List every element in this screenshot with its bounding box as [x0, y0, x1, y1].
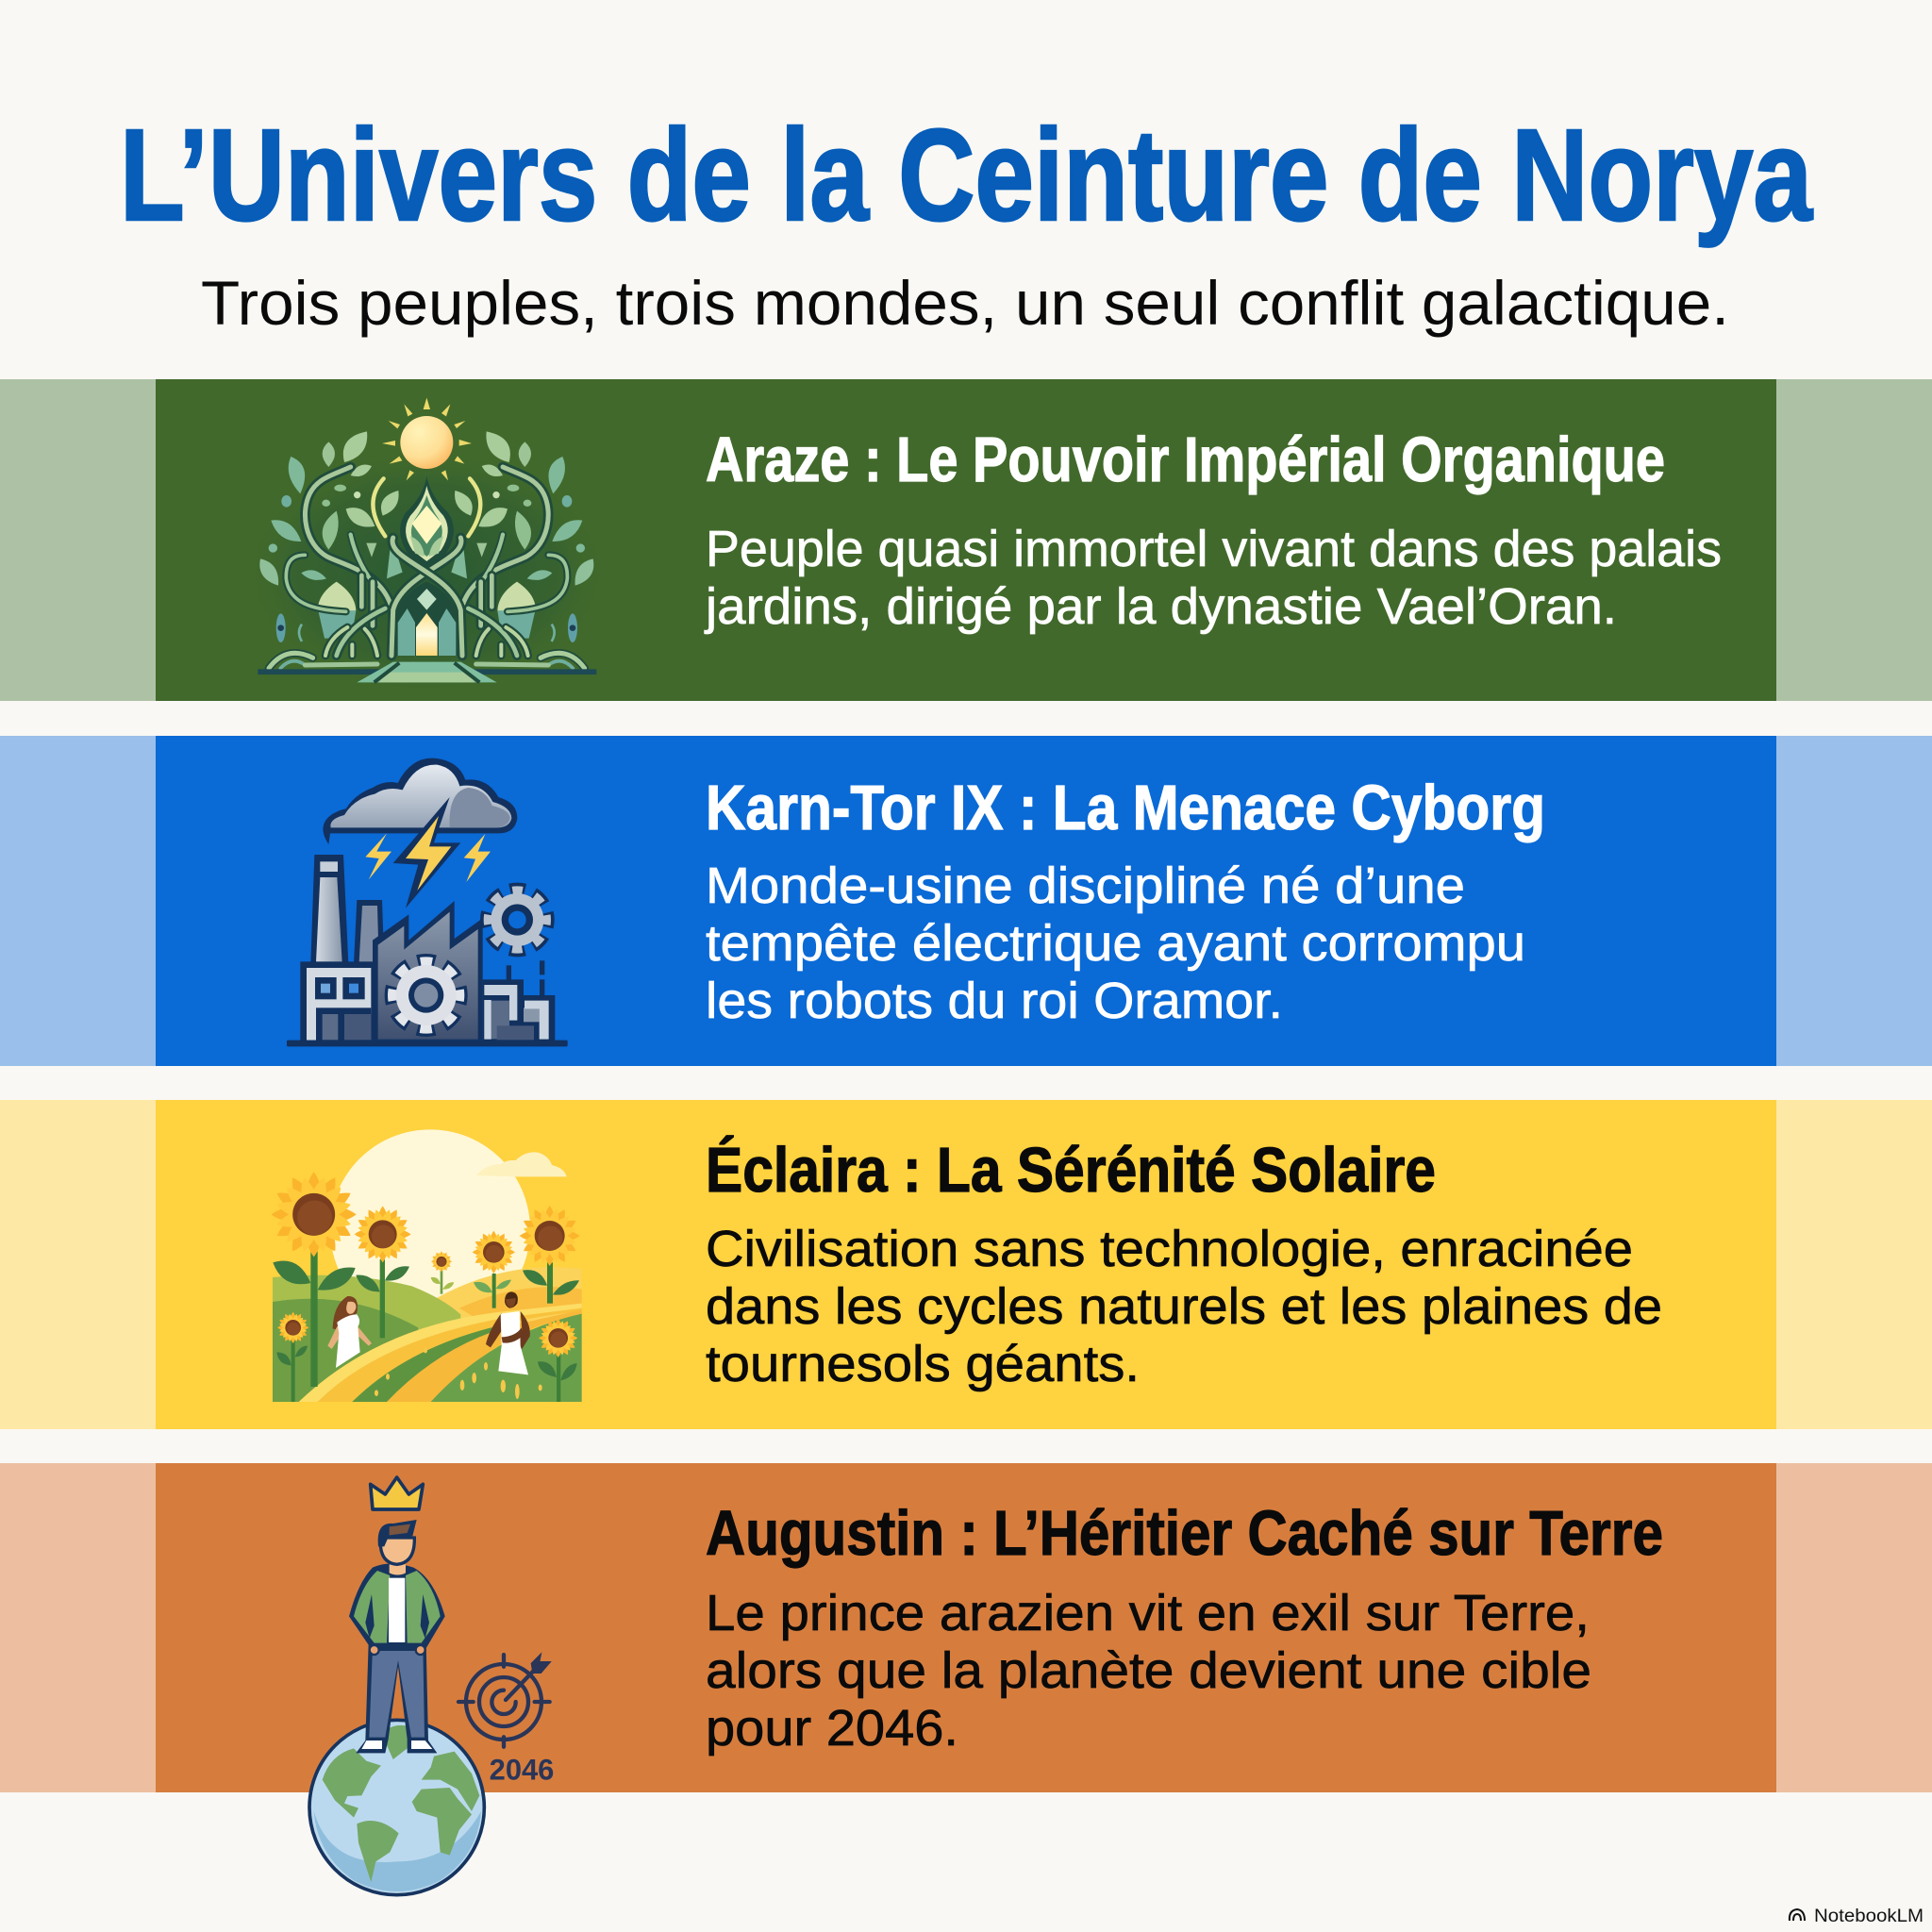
- globe: [309, 1720, 484, 1895]
- description: pour 2046.: [706, 1700, 958, 1757]
- target: [458, 1654, 550, 1747]
- description: [706, 858, 1525, 1029]
- year label: 2046: [490, 1754, 554, 1787]
- watermark: NotebookLM: NotebookLM: [1814, 1907, 1924, 1926]
- icon: crowned heir on Earth with target: [309, 1477, 554, 1895]
- description: alors que la planète devient une cible: [706, 1642, 1591, 1699]
- description: [704, 521, 1722, 635]
- panel: Éclaira: [0, 1100, 1932, 1429]
- description: Le prince arazien vit en exil sur Terre,: [706, 1585, 1590, 1641]
- panel: Augustin: [0, 1463, 1932, 1792]
- figure: woman: [327, 1296, 372, 1368]
- panel: Araze: [0, 379, 1932, 701]
- heading: Augustin : L’Héritier Caché sur Terre: [706, 1498, 1663, 1569]
- description: [706, 1221, 1662, 1392]
- description: les robots du roi Oramor.: [706, 973, 1283, 1029]
- description: dans les cycles naturels et les plaines de: [706, 1278, 1662, 1335]
- description: Civilisation sans technologie, enracinée: [706, 1221, 1633, 1277]
- description: tournesols géants.: [706, 1336, 1140, 1392]
- crown: [371, 1477, 423, 1509]
- heading: Éclaira : La Sérénité Solaire: [706, 1135, 1436, 1206]
- heading: Araze : Le Pouvoir Impérial Organique: [706, 425, 1665, 495]
- heading: Karn-Tor IX : La Menace Cyborg: [706, 773, 1545, 843]
- description: tempête électrique ayant corrompu: [706, 915, 1525, 972]
- description: Monde-usine discipliné né d’une: [706, 858, 1465, 914]
- figure: man: [486, 1291, 530, 1374]
- panel: Karn-Tor IX: [0, 736, 1932, 1066]
- description: Peuple quasi immortel vivant dans des palais: [706, 521, 1722, 577]
- description: jardins, dirigé par la dynastie Vael’Oran.: [704, 578, 1617, 635]
- man: [349, 1520, 445, 1753]
- icon: sunflower fields: [272, 1129, 582, 1402]
- description: [706, 1585, 1591, 1757]
- icon: organic palace with sun: [242, 398, 612, 698]
- subtitle: Trois peuples, trois mondes, un seul conflit galactique.: [201, 268, 1729, 338]
- icon: factory under electric storm: [287, 758, 568, 1046]
